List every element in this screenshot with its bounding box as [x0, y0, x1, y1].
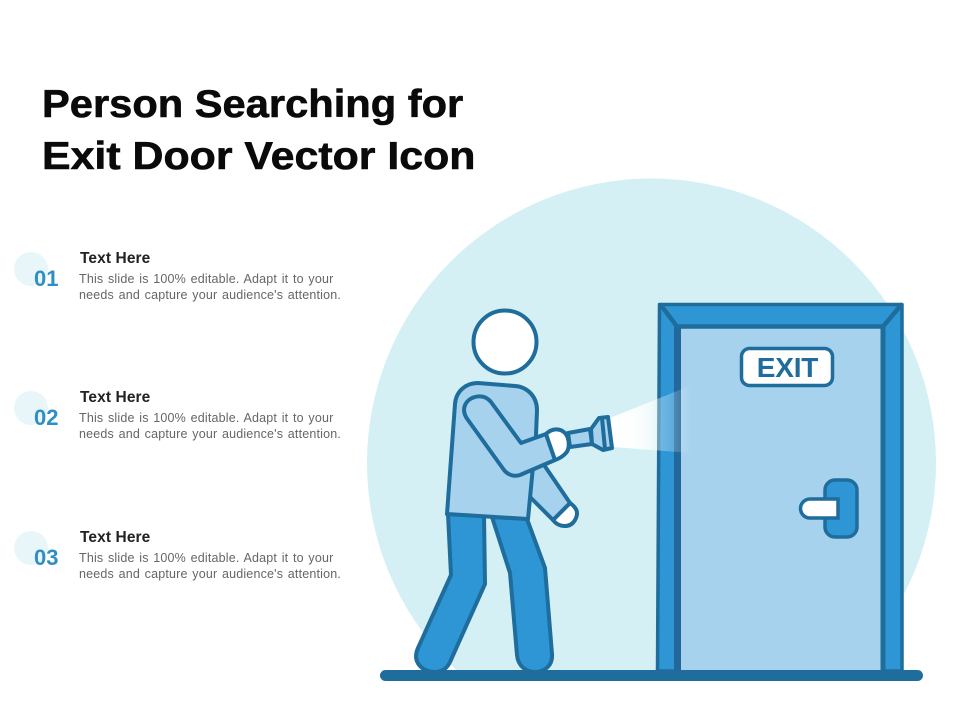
door handle: [800, 480, 857, 537]
title: [42, 83, 475, 178]
front arm: [464, 396, 555, 476]
floor: [380, 670, 923, 681]
item 02: 02: [34, 405, 58, 430]
item 03: This slide is 100% editable. Adapt it to your: [79, 551, 333, 565]
person: [416, 310, 612, 672]
exit sign: [742, 348, 832, 386]
title: Exit Door Vector Icon: [42, 135, 475, 178]
item 03: needs and capture your audience's attention.: [79, 567, 341, 581]
item 02: needs and capture your audience's attention.: [79, 427, 341, 441]
item 03: [14, 529, 341, 581]
legs: [416, 514, 485, 672]
item 01: 01: [34, 266, 58, 291]
background circle: [367, 178, 936, 720]
item 03: Text Here: [80, 529, 150, 546]
item 02: This slide is 100% editable. Adapt it to your: [79, 411, 333, 425]
illustration: [367, 178, 936, 681]
item 02: Text Here: [80, 389, 150, 406]
exit sign: EXIT: [757, 352, 818, 383]
front hand: [546, 429, 569, 460]
item 03: 03: [34, 545, 58, 570]
flashlight: [568, 417, 612, 450]
torso: [447, 383, 537, 519]
item 01: This slide is 100% editable. Adapt it to your: [79, 272, 333, 286]
item 01: needs and capture your audience's attention.: [79, 288, 341, 302]
item 01: [14, 250, 341, 302]
light beam: [610, 385, 692, 453]
item 01: Text Here: [80, 250, 150, 267]
title: Person Searching for: [42, 83, 463, 126]
door frame: [658, 304, 902, 671]
head: [474, 310, 536, 374]
item 02: [14, 389, 341, 441]
door panel: [680, 326, 883, 671]
door: [658, 304, 902, 671]
back arm: [525, 462, 577, 526]
